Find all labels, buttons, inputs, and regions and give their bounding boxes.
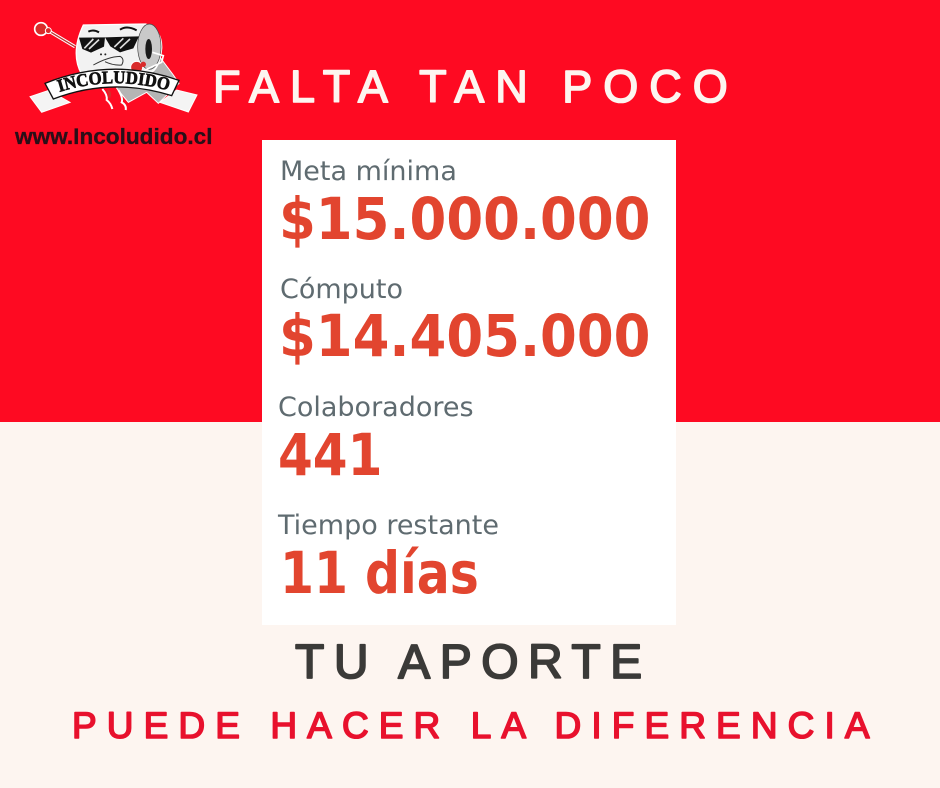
label: meta minima: Meta mínima xyxy=(280,156,457,187)
heading: tu aporte: TU APORTE xyxy=(295,636,652,689)
logo: Incoludido toilet paper mascot xyxy=(29,22,198,113)
icon: legs xyxy=(102,89,126,110)
icon: paper roll with sunglasses xyxy=(76,24,163,82)
label: colaboradores: Colaboradores xyxy=(278,392,474,423)
icon: hanging paper sheet xyxy=(117,55,179,103)
label: tiempo restante: Tiempo restante xyxy=(278,510,499,541)
value: colaboradores: 441 xyxy=(278,422,382,489)
banner ends xyxy=(30,90,197,112)
value: meta minima: $15.000.000 xyxy=(279,186,650,253)
icon: pin arm with left glove xyxy=(35,23,75,47)
subheading: puede hacer la diferencia: PUEDE HACER LA DIFERENCIA xyxy=(72,705,880,746)
banner with logo wordmark: INCOLUDIDO xyxy=(56,71,170,92)
panel: funding stats xyxy=(262,140,676,625)
website url: www.Incoludido.cl xyxy=(15,124,212,149)
label: computo: Cómputo xyxy=(280,274,403,305)
red top band xyxy=(0,0,940,422)
value: computo: $14.405.000 xyxy=(279,303,650,370)
value: tiempo restante: 11 días xyxy=(280,540,479,607)
title: FALTA TAN POCO xyxy=(213,61,739,112)
